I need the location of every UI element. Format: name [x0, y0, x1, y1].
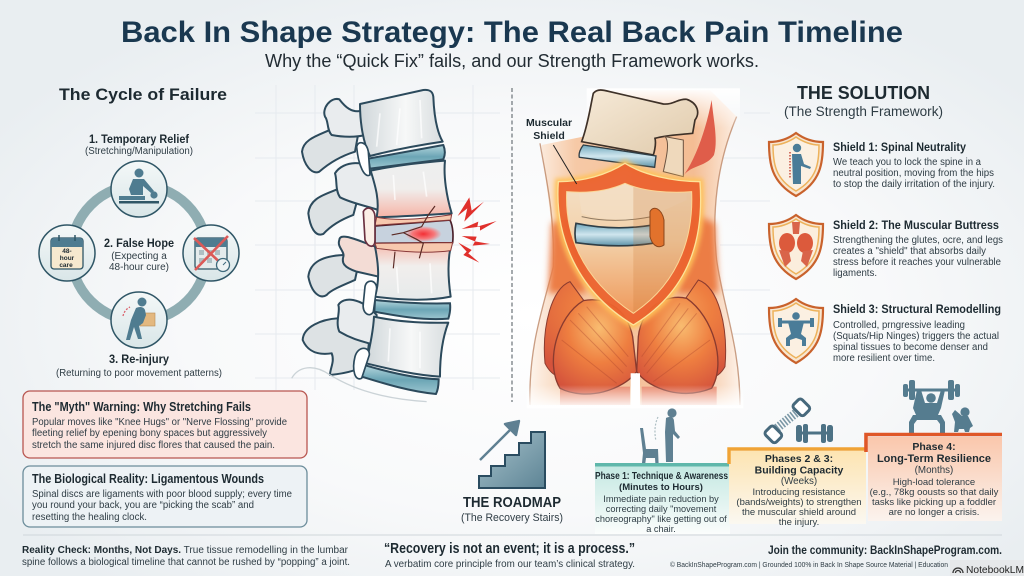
text: shield 1: We teach you to lock the spine in a	[833, 157, 981, 168]
phase 1 text: Phase 1: Technique & Awareness	[595, 471, 728, 482]
phase 1 text: correcting daily "movement	[606, 504, 717, 514]
top fade	[587, 88, 740, 128]
step 1 label: 1. Temporary Relief	[89, 132, 190, 146]
phase 4 text: Long-Term Resilience	[877, 453, 991, 465]
text: shield 3	[833, 304, 1001, 364]
text: shield 2: stress before it reaches your vulnerable	[833, 257, 1001, 268]
text: shield 2: ligaments.	[833, 268, 877, 279]
icon: massage therapy	[111, 161, 167, 217]
text: shield 1: neutral position, moving from the hips	[833, 168, 994, 179]
shield 2 item	[769, 215, 1003, 279]
phase 4 text	[870, 441, 999, 518]
text: shield 2: Strengthening the glutes, ocre, and legs	[833, 235, 1003, 246]
text: shield 3: spinal tissues to become denser and	[833, 342, 988, 353]
icon: structural remodelling shield	[769, 299, 823, 363]
step 3 label	[56, 352, 222, 379]
phase 1	[595, 408, 730, 534]
phases 2 and 3 text: the injury.	[779, 517, 819, 528]
phase 1 text: Immediate pain reduction by	[603, 494, 719, 504]
oblique muscles	[548, 213, 718, 293]
heading: cycle of failure: The Cycle of Failure	[59, 85, 227, 104]
step 3 label: 3. Re-injury	[109, 352, 169, 366]
callout: myth warning	[23, 391, 307, 458]
footer: quote	[384, 541, 635, 570]
text: shield 2: Shield 2: The Muscular Buttress	[833, 220, 999, 232]
foramina	[357, 143, 370, 176]
label: muscular shield: Shield	[533, 130, 565, 142]
icon: 48-hour cure calendar	[39, 225, 95, 281]
icon: spinal neutrality shield	[769, 133, 823, 196]
subheading: (The Strength Framework)	[784, 104, 943, 119]
callout: myth warning: Popular moves like "Knee Hugs" or "Nerve Flossing" provide	[32, 417, 287, 428]
phase 1 text: (Minutes to Hours)	[619, 482, 703, 493]
callout: biological reality: Spinal discs are ligaments with poor blood supply; every time	[32, 489, 292, 500]
icon: upward arrow	[480, 421, 519, 460]
icon: person and chair	[640, 408, 680, 473]
phase 4 text: High-load tolerance	[893, 477, 975, 488]
step 1 label: (Stretching/Manipulation)	[85, 146, 193, 157]
phase 1 text: a chair.	[646, 524, 676, 534]
footer: reality check	[22, 545, 350, 568]
phases 2 and 3 text: Introducing resistance	[753, 487, 845, 498]
text: shield 3: (Squats/Hip Ninges) triggers the actual	[833, 331, 999, 342]
phase 1 text	[595, 471, 728, 534]
footer: reality check: spine follows a biological timeline that cannot be rushed by “popping” a joint.	[22, 557, 350, 568]
vertebra 1	[360, 90, 443, 156]
icon: crossed-out calendar	[183, 225, 239, 281]
red back muscle	[684, 100, 716, 175]
fading base	[292, 368, 427, 402]
damaged disc	[375, 220, 453, 243]
shield glow	[558, 163, 701, 325]
phase 4 text: Phase 4:	[912, 441, 956, 453]
orange foramen	[650, 208, 664, 247]
step 1 label	[85, 132, 193, 157]
footer: reality check: Reality Check: Months, Not Days. True tissue remodelling in the lumbar	[22, 545, 349, 556]
text: shield 3: Controlled, prngressive leading	[833, 320, 965, 331]
phases 2 and 3 text	[736, 453, 862, 528]
illustration: injured spine	[292, 90, 497, 402]
icon: resistance band and dumbbell	[764, 398, 833, 444]
lumbar disc lower	[575, 223, 654, 246]
disc 3	[374, 300, 450, 319]
illustration: muscular shield over spine	[527, 88, 743, 408]
icon: muscular buttress shield	[769, 215, 823, 279]
shield 3 item	[769, 299, 1001, 364]
icon: 48-hour cure calendar: hour	[60, 255, 75, 262]
cracks	[392, 206, 435, 268]
footer: community	[670, 545, 1002, 569]
phase 4 text: are no longer a crisis.	[889, 507, 979, 518]
phases 2 and 3 text: the muscular shield around	[742, 507, 856, 518]
leg gap	[631, 373, 640, 408]
bottom fade	[527, 385, 743, 408]
icon: 48-hour cure calendar: care	[59, 262, 73, 269]
phase 1 text: choreography" like getting out of	[595, 514, 727, 524]
side muscles	[544, 280, 726, 378]
phases 2 and 3 text: Building Capacity	[755, 464, 843, 476]
shield band	[558, 163, 701, 325]
heading: the solution: THE SOLUTION	[797, 83, 930, 103]
text: shield 3: Shield 3: Structural Remodelling	[833, 304, 1001, 316]
step 3 label: (Returning to poor movement patterns)	[56, 368, 222, 379]
notebooklm badge	[950, 560, 1024, 576]
text: shield 2: creates a "shield" that absorbs daily	[833, 246, 986, 257]
callout: myth warning: stretch the same injured disc flores that caused the pain.	[32, 440, 275, 451]
icon: re-injury lifting box	[111, 292, 167, 348]
torso	[530, 90, 740, 405]
vertebra 3	[375, 243, 452, 300]
spinous knobs	[324, 99, 365, 137]
notebooklm badge: NotebookLM	[966, 564, 1024, 576]
heading: the roadmap: THE ROADMAP	[463, 494, 561, 511]
footer: community: © BackInShapeProgram.com | Grounded 100% in Back In Shape Source Material | Education	[670, 561, 948, 569]
panel: the solution	[769, 83, 1003, 364]
phase 4 text: tasks like picking up a foddler	[872, 497, 996, 508]
transverse processes	[302, 128, 358, 172]
text: shield 1: to stop the daily irritation of the injury.	[833, 179, 995, 190]
shield 1 item	[769, 133, 995, 196]
icon: 48-hour cure calendar: 48-	[62, 248, 72, 255]
subheading: (The Recovery Stairs)	[461, 512, 563, 524]
panel: the roadmap	[461, 421, 563, 524]
pain bolts	[458, 197, 497, 263]
cycle ring	[71, 185, 207, 321]
phase 4 panel	[868, 437, 1002, 521]
text: shield 2	[833, 220, 1003, 279]
callout: myth warning: fleeting relief by epening bony spaces but aggressively	[32, 428, 267, 439]
disc 4	[362, 365, 439, 394]
lumbar disc top	[579, 145, 656, 167]
disc 1	[368, 145, 445, 169]
shield interior	[567, 183, 692, 313]
icon: recovery stairs	[479, 432, 545, 488]
divider	[511, 88, 513, 402]
text: shield 1: Shield 1: Spinal Neutrality	[833, 142, 967, 154]
pedicle	[663, 137, 683, 177]
shield tint	[625, 183, 692, 313]
label: muscular shield: Muscular	[526, 117, 572, 129]
phases 2 and 3 text: (bands/weights) to strengthen	[736, 497, 862, 508]
glutes	[553, 300, 637, 394]
step 2 label: 48-hour cure)	[109, 262, 169, 273]
callout: biological reality	[23, 466, 307, 527]
text: shield 3: more resilient over time.	[833, 353, 935, 364]
icon: squatting lifter and toddler	[903, 380, 973, 433]
label: muscular shield	[526, 117, 572, 142]
phase 4	[866, 380, 1002, 521]
callout: myth warning: The "Myth" Warning: Why Stretching Fails	[32, 400, 251, 414]
phases 2 and 3 panel	[729, 451, 866, 524]
phase 4 text: (Months)	[915, 465, 953, 476]
phases 2 and 3 text: Phases 2 & 3:	[765, 453, 833, 465]
callout: biological reality: The Biological Reality: Ligamentous Wounds	[32, 472, 264, 486]
callout: biological reality: resetting the healing clock.	[32, 512, 147, 523]
title: Back In Shape Strategy: The Real Back Pain Timeline	[121, 16, 903, 49]
panel: cycle of failure	[39, 85, 239, 379]
subtitle: Why the “Quick Fix” fails, and our Strength Framework works.	[265, 51, 759, 71]
footer: quote: “Recovery is not an event; it is a process.”	[384, 541, 635, 557]
phase 1 panel	[595, 466, 730, 534]
callout: biological reality: you round your back, you are “picking the scab” and	[32, 500, 254, 511]
vertebra 2	[371, 161, 452, 217]
leg stripes	[560, 387, 717, 405]
vertebra 4	[366, 317, 448, 377]
step 2 label: 2. False Hope	[104, 236, 174, 250]
footer: quote: A verbatim core principle from our team’s clinical strategy.	[385, 558, 635, 570]
lumbar vertebra top	[582, 90, 698, 155]
phase 4 text: (e.g., 78kg oousts so that daily	[870, 487, 999, 498]
phase 2 and 3	[729, 398, 866, 528]
shield pointer	[553, 145, 577, 184]
step 2 label	[104, 236, 174, 273]
step 2 label: (Expecting a	[111, 251, 167, 262]
phases 2 and 3 text: (Weeks)	[781, 476, 817, 487]
text: shield 1	[833, 142, 995, 190]
